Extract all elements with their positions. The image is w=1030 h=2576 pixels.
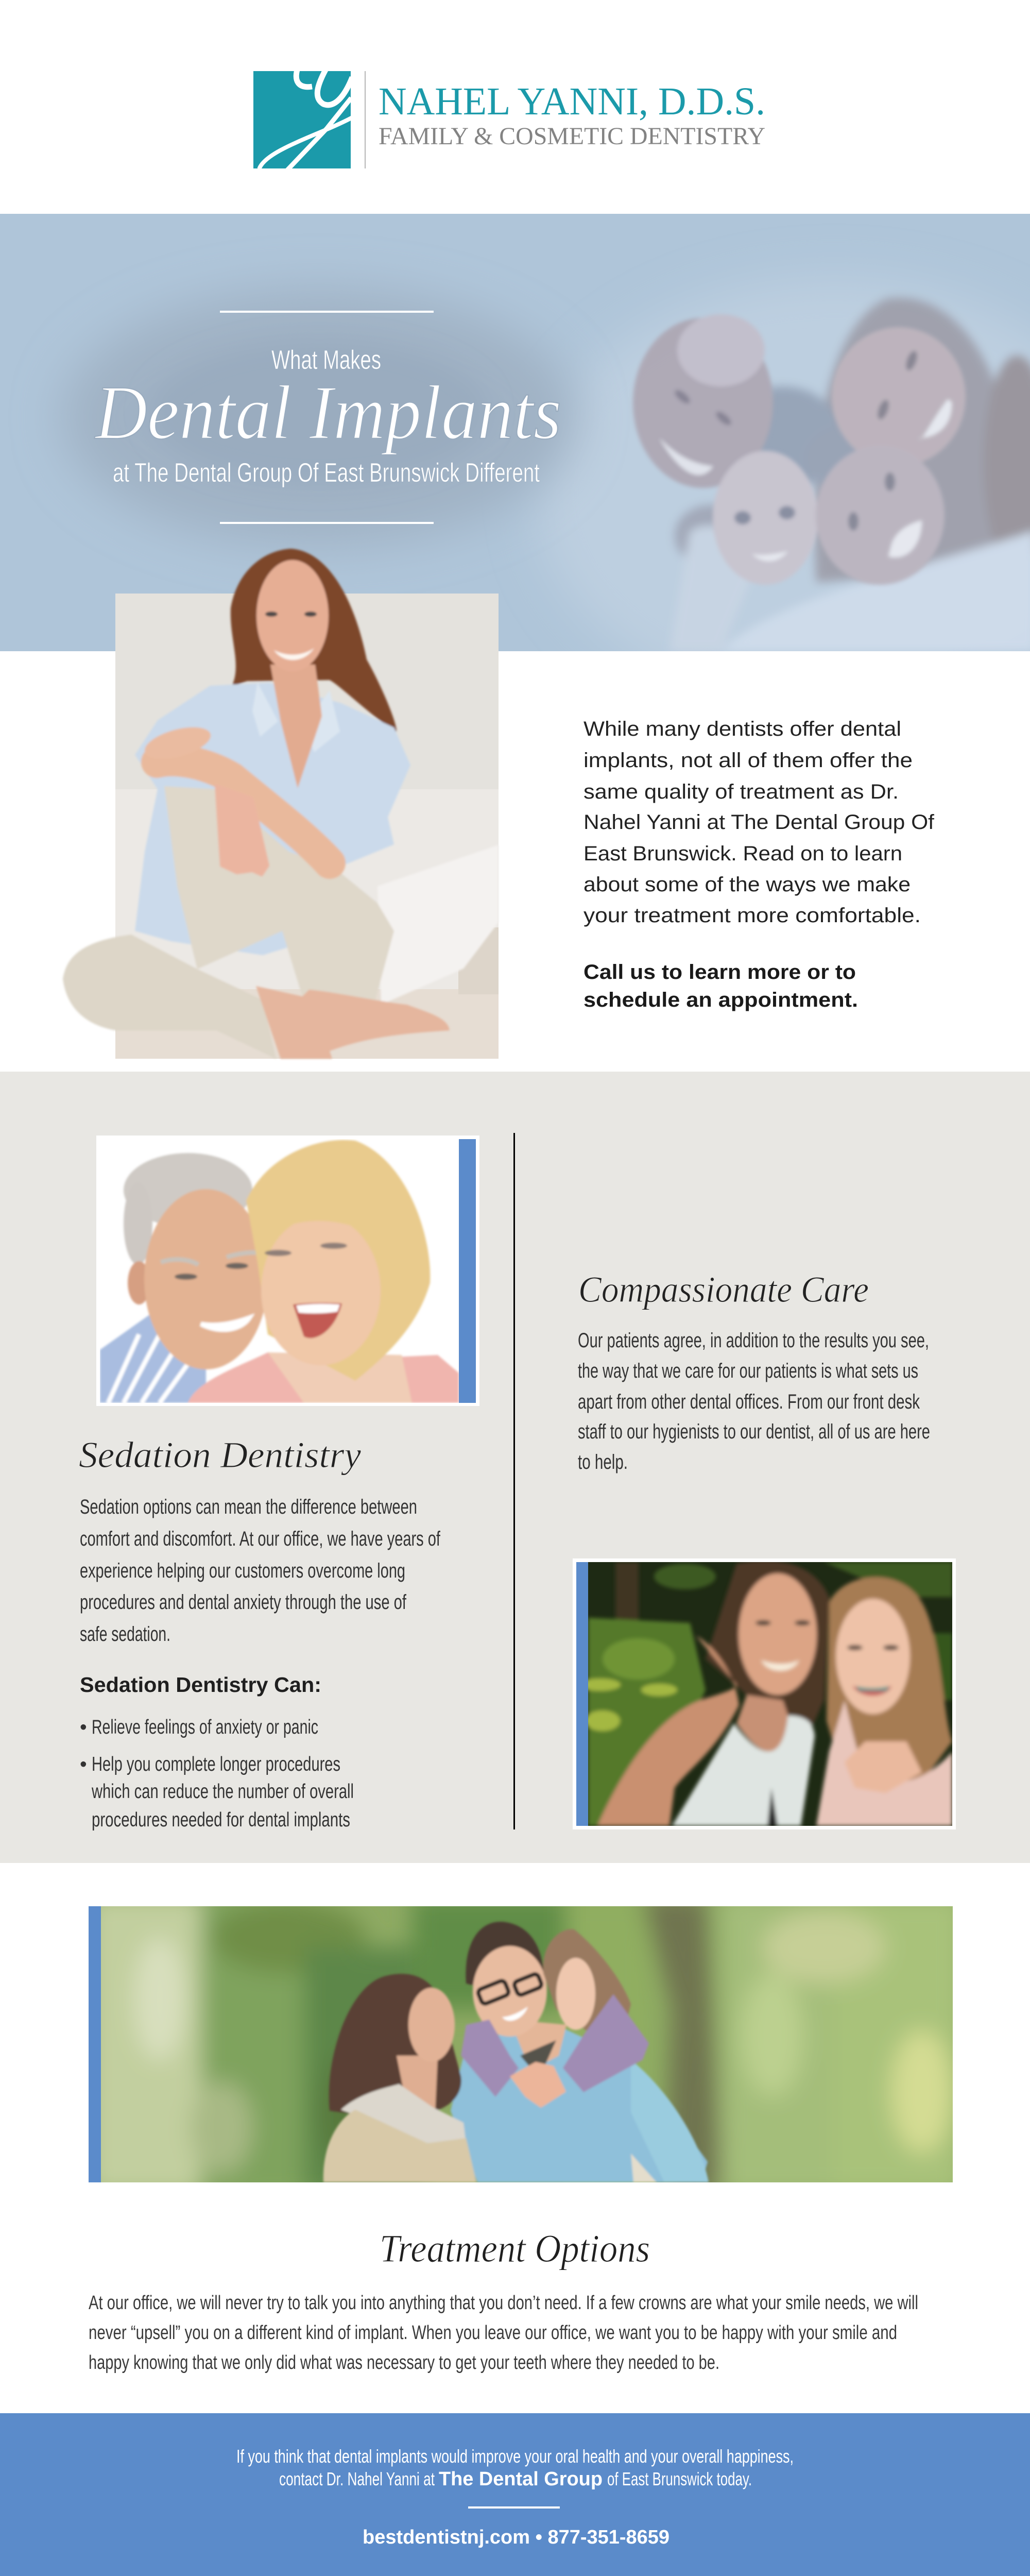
hero title: Dental Implants: [94, 370, 561, 455]
intro paragraph: about some of the ways we make: [583, 873, 911, 896]
sedation bullet list: procedures needed for dental implants: [92, 1809, 350, 1831]
mom face and neck: [736, 1695, 788, 1752]
man face: [144, 1189, 268, 1369]
panel: footer: [0, 2413, 1030, 2576]
man hair: [124, 1153, 252, 1227]
face: [256, 560, 329, 671]
logo mark: [253, 68, 352, 172]
sedation paragraph: comfort and discomfort. At our office, we have years of: [80, 1528, 441, 1550]
footer message: of East Brunswick today.: [607, 2468, 752, 2489]
practice name: NAHEL YANNI, D.D.S.: [379, 80, 765, 123]
sedation paragraph: procedures and dental anxiety through the use of: [80, 1591, 407, 1614]
woman coat: [323, 2110, 476, 2182]
woman hair: [329, 1974, 461, 2117]
treatment paragraph: happy knowing that we only did what was necessary to get your teeth where they needed to be.: [89, 2352, 719, 2374]
intro paragraph: implants, not all of them offer the: [583, 749, 913, 772]
hero background: [0, 214, 1030, 651]
footer message: If you think that dental implants would improve your oral health and your overall happiness,: [236, 2446, 794, 2467]
hand: [216, 786, 268, 875]
intro paragraph: East Brunswick. Read on to learn: [583, 842, 902, 865]
shirt: [135, 683, 410, 955]
intro call to action: Call us to learn more or to: [583, 961, 856, 984]
sedation bullet list: Help you complete longer procedures: [92, 1753, 340, 1775]
child left sleeve: [461, 2020, 519, 2097]
intro paragraph: your treatment more comfortable.: [583, 904, 921, 927]
child hair: [543, 1929, 631, 2040]
photo: mother and daughter: [573, 1558, 956, 1829]
panel: gray content section: [0, 1072, 1030, 1863]
sedation bullet list: which can reduce the number of overall: [91, 1781, 354, 1803]
daughter face: [836, 1599, 910, 1714]
sedation paragraph: Sedation options can mean the difference between: [80, 1496, 417, 1518]
shin and foot: [256, 986, 450, 1059]
hero rule bottom: [220, 522, 434, 524]
man sweater: [451, 2025, 708, 2182]
woman top: [188, 1352, 459, 1403]
trousers glimpse: [631, 2154, 657, 2182]
sedation paragraph: safe sedation.: [80, 1623, 170, 1646]
intro paragraph: Nahel Yanni at The Dental Group Of: [583, 811, 935, 834]
sedation bullet list: •: [80, 1716, 87, 1738]
practice tagline: FAMILY & COSMETIC DENTISTRY: [379, 123, 765, 150]
sedation paragraph: [80, 1496, 441, 1646]
woman neck: [397, 2056, 438, 2112]
blurred foliage: [88, 1896, 201, 2195]
child right sleeve: [563, 1994, 649, 2092]
lower leg: [63, 935, 276, 1059]
intro text: [583, 718, 935, 1011]
mom top: [672, 1716, 815, 1826]
sedation subheading: Sedation Dentistry Can:: [80, 1673, 321, 1697]
arm: [157, 760, 330, 863]
photo: family piggyback: [88, 1896, 963, 2195]
collar: [252, 683, 340, 752]
girl face: [713, 451, 818, 585]
mom hair: [706, 1561, 829, 1747]
photo: smiling woman on sofa: [63, 549, 499, 1059]
intro paragraph: [583, 718, 935, 927]
man face: [473, 1946, 547, 2037]
mother face: [832, 327, 966, 466]
hero rule top: [220, 311, 434, 313]
arm: [597, 1636, 739, 1826]
footer divider: [468, 2506, 560, 2509]
man shirt: [100, 1311, 206, 1403]
photo: older couple: [96, 1136, 479, 1406]
woman face: [408, 1988, 455, 2062]
treatment paragraph: [89, 2292, 918, 2374]
sedation bullet list: Relieve feelings of anxiety or panic: [92, 1716, 318, 1738]
vertical divider: [513, 1133, 515, 1829]
woman hair: [246, 1140, 430, 1381]
footer message: contact Dr. Nahel Yanni at: [279, 2468, 435, 2489]
heading: sedation dentistry: Sedation Dentistry: [79, 1434, 361, 1476]
woman scarf: [341, 2084, 466, 2143]
hero subtitle: at The Dental Group Of East Brunswick Different: [113, 458, 540, 488]
raised leg: [164, 786, 394, 1004]
intro call to action: schedule an appointment.: [583, 989, 858, 1011]
intro paragraph: same quality of treatment as Dr.: [583, 781, 899, 803]
boy face: [816, 446, 945, 585]
background foliage: [615, 1562, 639, 1624]
man hair: [466, 1922, 544, 1986]
man neck: [510, 2020, 566, 2071]
intro call to action: [583, 961, 858, 1011]
hair: [231, 549, 397, 732]
compassionate care paragraph: [578, 1329, 930, 1473]
daughter top: [816, 1700, 952, 1826]
man ear: [128, 1261, 150, 1304]
header logo: [253, 68, 765, 172]
family photo, faded: [633, 298, 1030, 651]
child face: [556, 1958, 595, 2030]
logo divider: [365, 71, 366, 168]
woman face: [261, 1216, 381, 1365]
compassionate care paragraph: apart from other dental offices. From our front desk: [578, 1391, 920, 1413]
man face: [633, 318, 773, 488]
clasped hands: [510, 2062, 566, 2108]
sedation bullet list: •: [80, 1753, 87, 1775]
sedation bullet list: [80, 1716, 354, 1831]
footer message: The Dental Group: [439, 2468, 603, 2490]
compassionate care paragraph: to help.: [578, 1451, 628, 1473]
hero banner: [0, 214, 1030, 651]
hero eyebrow: What Makes: [271, 345, 381, 375]
footer message: [236, 2446, 794, 2490]
daughter hair: [827, 1577, 952, 1783]
intro paragraph: While many dentists offer dental: [583, 718, 901, 740]
footer contact line: bestdentistnj.com • 877-351-8659: [363, 2527, 670, 2548]
heading: compassionate care: Compassionate Care: [578, 1269, 869, 1310]
sedation paragraph: experience helping our customers overcome long: [80, 1560, 405, 1582]
neck: [270, 665, 322, 788]
heading: treatment options: Treatment Options: [380, 2227, 650, 2270]
